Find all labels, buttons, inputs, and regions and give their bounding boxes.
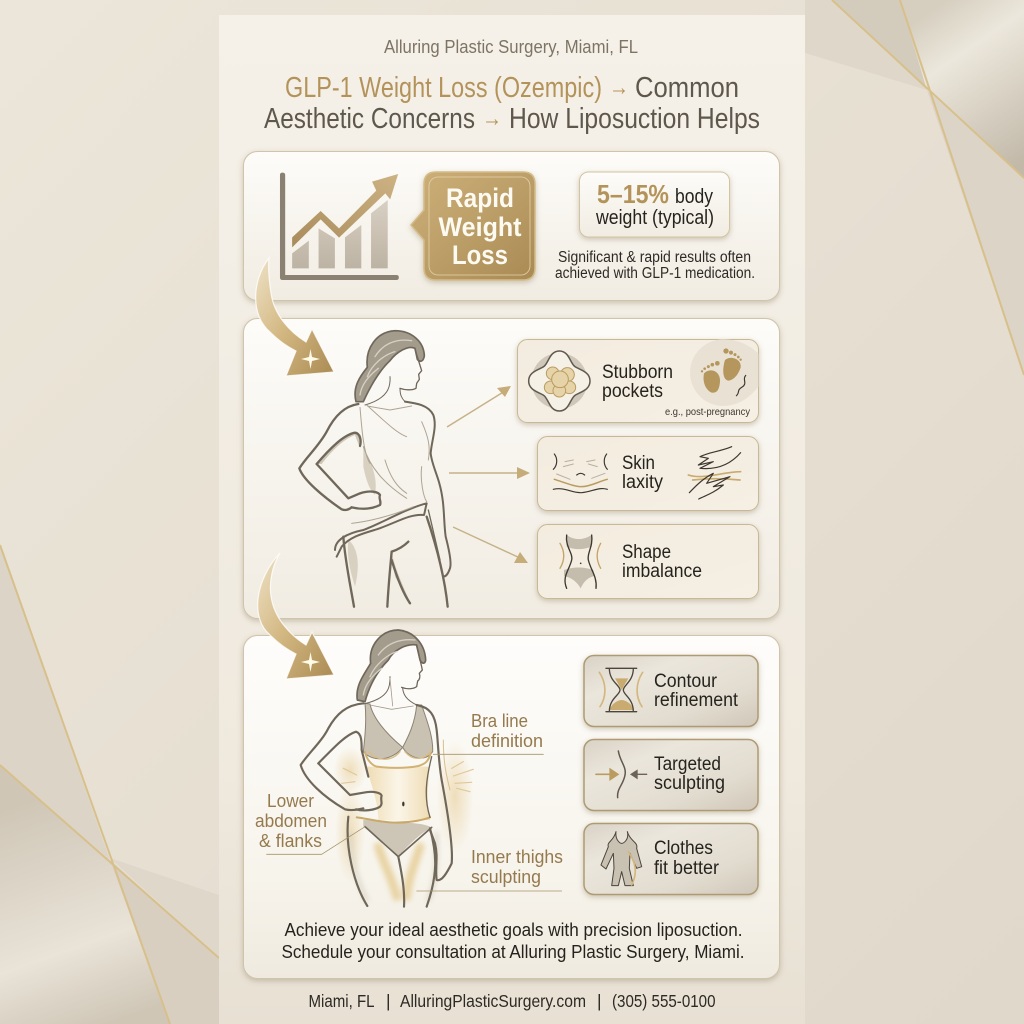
icon: hands pinching skin <box>688 447 741 499</box>
card: clothes fit better: Clothes <box>654 838 713 859</box>
labels: treatment zones: Bra line <box>471 710 528 731</box>
footer contact line <box>308 991 716 1011</box>
title <box>264 72 760 135</box>
labels: treatment zones: abdomen <box>255 810 327 831</box>
icon: torso <box>560 535 601 588</box>
arrow: to stubborn pockets <box>447 386 511 427</box>
icon: dressed figure <box>601 832 642 886</box>
callout: 5-15% body weight: weight (typical) <box>595 207 714 229</box>
figure: woman in underwear with treatment zones <box>267 630 562 907</box>
badge: rapid weight loss: Rapid <box>446 183 514 213</box>
callout: 5-15% body weight: 5–15% <box>597 179 669 209</box>
callout: 5-15% body weight: body <box>675 186 713 208</box>
icon: arrows pressing curve <box>596 751 647 798</box>
card: skin laxity: Skin <box>622 453 655 474</box>
arrow: to skin laxity <box>449 467 530 479</box>
badge: rapid weight loss <box>411 172 535 280</box>
card: clothes fit better: fit better <box>654 858 720 879</box>
footer contact line: | <box>386 991 391 1011</box>
description: Significant & rapid results often <box>558 249 751 266</box>
call to action: Schedule your consultation at Alluring Plastic Surgery, Miami. <box>282 941 744 962</box>
description: achieved with GLP-1 medication. <box>555 265 755 282</box>
call to action <box>282 919 744 962</box>
figure: woman in loose top <box>299 331 451 607</box>
chart: rising bars and arrow <box>280 173 399 280</box>
arrow: concerns to results <box>258 553 334 679</box>
icon: loose abdomen <box>553 454 607 493</box>
footer contact line: AlluringPlasticSurgery.com <box>400 991 586 1011</box>
callout: 5-15% body weight <box>580 172 730 237</box>
clinic name: Alluring Plastic Surgery, Miami, FL <box>384 37 638 57</box>
title: → <box>482 105 502 132</box>
card: stubborn pockets: pockets <box>602 381 663 402</box>
labels: treatment zones: definition <box>471 730 543 751</box>
labels: treatment zones <box>255 710 563 887</box>
title: Common <box>635 72 739 104</box>
title: GLP-1 Weight Loss (Ozempic) <box>285 72 602 104</box>
labels: treatment zones: Inner thighs <box>471 846 563 867</box>
card: targeted sculpting <box>584 740 758 810</box>
card: shape imbalance <box>538 524 758 598</box>
card: contour refinement <box>584 656 758 726</box>
page sheet <box>219 15 805 1024</box>
leader lines <box>267 754 562 891</box>
panel: rapid weight loss <box>244 152 780 300</box>
card: targeted sculpting: sculpting <box>654 773 725 794</box>
card: stubborn pockets: Stubborn <box>602 362 673 383</box>
title: → <box>609 74 629 101</box>
card: stubborn pockets: e.g., post-pregnancy <box>665 406 751 418</box>
badge: rapid weight loss: Weight <box>438 212 522 242</box>
card: skin laxity: laxity <box>622 472 663 493</box>
call to action: Achieve your ideal aesthetic goals with precision liposuction. <box>284 919 742 940</box>
card: shape imbalance: Shape <box>622 542 671 563</box>
labels: treatment zones: sculpting <box>471 866 541 887</box>
card: targeted sculpting: Targeted <box>654 754 721 775</box>
badge: rapid weight loss: Loss <box>452 240 508 270</box>
footer contact line: (305) 555-0100 <box>612 991 716 1011</box>
icon: footprints <box>690 339 758 406</box>
icon: hourglass <box>599 668 643 712</box>
card: shape imbalance: imbalance <box>622 561 702 582</box>
footer contact line: | <box>597 991 602 1011</box>
card: contour refinement: Contour <box>654 671 718 692</box>
panel: common concerns <box>244 318 780 618</box>
card: clothes fit better <box>584 824 758 894</box>
card: stubborn pockets <box>518 339 758 422</box>
description <box>555 249 755 282</box>
footer contact line: Miami, FL <box>308 991 375 1011</box>
title: How Liposuction Helps <box>509 103 760 135</box>
card: contour refinement: refinement <box>654 690 739 711</box>
title: Aesthetic Concerns <box>264 103 475 135</box>
arrow: to shape imbalance <box>453 527 528 563</box>
labels: treatment zones: Lower <box>267 790 314 811</box>
arrow: weight loss to concerns <box>256 258 334 376</box>
panel: how liposuction helps <box>244 630 780 978</box>
card: skin laxity <box>538 436 758 510</box>
icon: fat cells <box>529 351 590 411</box>
labels: treatment zones: & flanks <box>259 830 322 851</box>
